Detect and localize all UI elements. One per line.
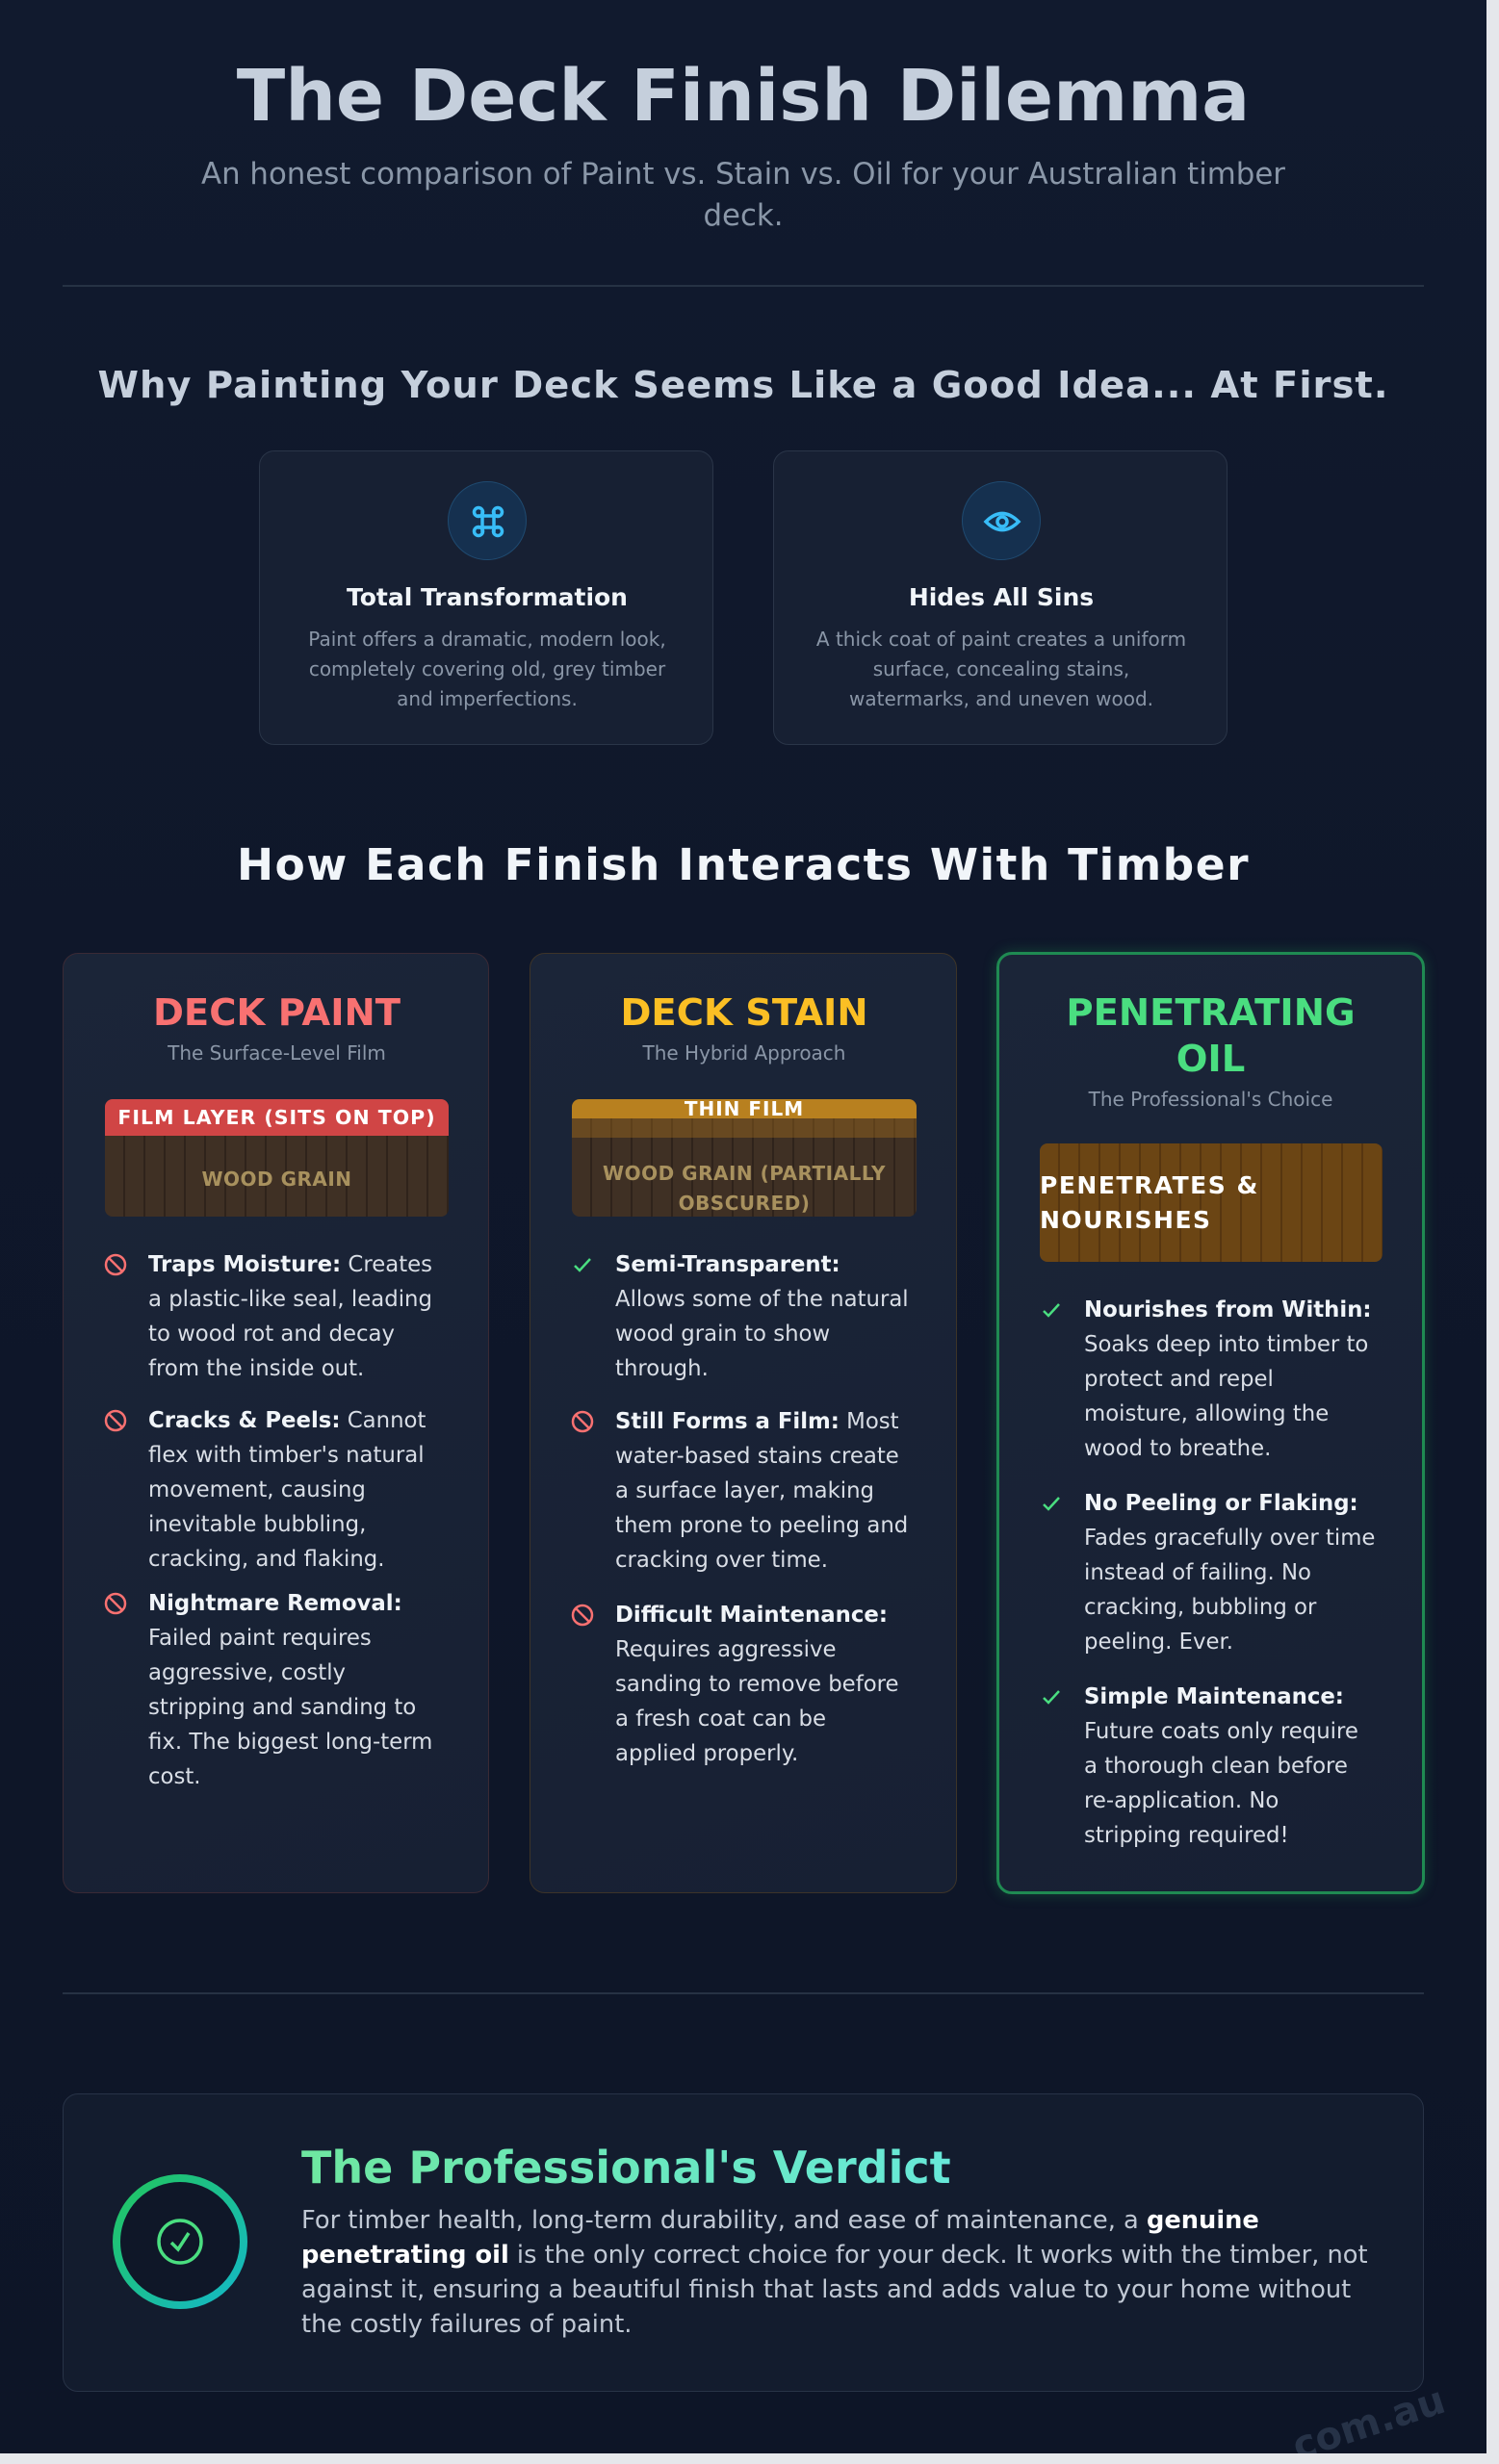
- card text: A thick coat of paint creates a uniform: [816, 628, 1186, 651]
- panel: penetrating oil: Fades gracefully over time: [1084, 1526, 1375, 1551]
- oil title: PENETRATING: [1066, 991, 1356, 1035]
- card text: [816, 628, 1186, 710]
- panel: penetrating oil: Soaks deep into timber to: [1084, 1332, 1368, 1357]
- panel: penetrating oil: cracking, bubbling or: [1084, 1595, 1316, 1620]
- panel: deck paint: Cracks & Peels: Cannot: [148, 1408, 426, 1433]
- panel: total transformation: [259, 450, 713, 745]
- panel: penetrating oil: No Peeling or Flaking:: [1084, 1491, 1358, 1516]
- paint subtitle: The Surface-Level Film: [168, 1041, 386, 1065]
- card text: Paint offers a dramatic, modern look,: [308, 628, 666, 651]
- panel: penetrating oil: moisture, allowing the: [1084, 1401, 1329, 1426]
- panel: deck paint: to wood rot and decay: [148, 1322, 395, 1347]
- verdict text: the costly failures of paint.: [301, 2310, 632, 2339]
- panel: hides all sins: [773, 450, 1228, 745]
- diagram: paint layers: WOOD GRAIN: [201, 1168, 352, 1191]
- panel: deck paint: inevitable bubbling,: [148, 1512, 366, 1537]
- card text: surface, concealing stains,: [873, 657, 1129, 680]
- panel: penetrating oil: instead of failing. No: [1084, 1560, 1311, 1585]
- panel: deck stain: Semi-Transparent:: [615, 1252, 840, 1277]
- stain title: DECK STAIN: [620, 991, 868, 1035]
- panel: deck stain: a surface layer, making: [615, 1478, 874, 1503]
- card title: Total Transformation: [347, 583, 628, 611]
- panel: deck paint: from the inside out.: [148, 1356, 364, 1381]
- card text: [308, 628, 666, 710]
- panel: deck paint: fix. The biggest long-term: [148, 1730, 432, 1755]
- panel: deck stain: [530, 953, 957, 1893]
- panel: deck stain: Difficult Maintenance:: [615, 1603, 888, 1628]
- card title: Hides All Sins: [909, 583, 1094, 611]
- paint title: DECK PAINT: [153, 991, 401, 1035]
- panel: deck stain: a fresh coat can be: [615, 1707, 826, 1732]
- panel: deck paint: movement, causing: [148, 1477, 366, 1502]
- panel: penetrating oil: Simple Maintenance:: [1084, 1684, 1344, 1709]
- panel: deck paint: a plastic-like seal, leading: [148, 1287, 432, 1312]
- panel: verdict: [63, 2093, 1424, 2392]
- diagram: stain layers: WOOD GRAIN (PARTIALLY: [603, 1162, 886, 1185]
- panel: deck stain: through.: [615, 1356, 709, 1381]
- panel: deck paint: Failed paint requires: [148, 1626, 372, 1651]
- heading: how each finish: How Each Finish Interacts With Timber: [237, 839, 1250, 890]
- panel: deck paint: flex with timber's natural: [148, 1443, 425, 1468]
- card text: watermarks, and uneven wood.: [849, 687, 1153, 710]
- diagram: stain layers: OBSCURED): [679, 1192, 810, 1215]
- subtitle: [201, 157, 1285, 233]
- panel: deck paint: cracking, and flaking.: [148, 1547, 385, 1572]
- oil list: [1043, 1297, 1375, 1848]
- stain list: [572, 1252, 909, 1766]
- oil title: [1066, 991, 1356, 1081]
- panel: penetrating oil: wood to breathe.: [1084, 1436, 1271, 1461]
- panel: deck stain: wood grain to show: [615, 1322, 830, 1347]
- panel: penetrating oil: [996, 952, 1425, 1894]
- diagram: stain layers: [572, 1099, 917, 1217]
- panel: penetrating oil: protect and repel: [1084, 1367, 1274, 1392]
- title: The Deck Finish Dilemma: [237, 55, 1250, 138]
- diagram: oil: PENETRATES &: [1040, 1171, 1259, 1199]
- panel: deck stain: Allows some of the natural: [615, 1287, 909, 1312]
- icon: verdict check circle: [113, 2174, 247, 2309]
- panel: penetrating oil: stripping required!: [1084, 1823, 1289, 1848]
- heading: why painting: Why Painting Your Deck Seems Like a Good Idea... At First.: [98, 364, 1388, 407]
- panel: penetrating oil: a thorough clean before: [1084, 1754, 1348, 1779]
- icon: eye: [962, 481, 1041, 560]
- diagram: paint layers: [105, 1099, 449, 1217]
- panel: penetrating oil: Nourishes from Within:: [1084, 1297, 1372, 1322]
- verdict heading: The Professional's Verdict: [301, 2142, 951, 2194]
- verdict text: [301, 2206, 1368, 2339]
- subtitle: deck.: [703, 198, 784, 233]
- panel: deck stain: them prone to peeling and: [615, 1513, 908, 1538]
- stain subtitle: The Hybrid Approach: [643, 1041, 845, 1065]
- panel: deck stain: cracking over time.: [615, 1548, 828, 1573]
- verdict text: penetrating oil is the only correct choice for your deck. It works with the timber, not: [301, 2241, 1368, 2270]
- icon: command: [448, 481, 527, 560]
- panel: deck stain: Requires aggressive: [615, 1637, 837, 1662]
- panel: deck paint: stripping and sanding to: [148, 1695, 416, 1720]
- card text: and imperfections.: [397, 687, 578, 710]
- card text: completely covering old, grey timber: [309, 657, 665, 680]
- oil title: OIL: [1176, 1038, 1245, 1081]
- paint list: [104, 1252, 432, 1789]
- panel: deck paint: aggressive, costly: [148, 1660, 346, 1685]
- oil subtitle: The Professional's Choice: [1089, 1088, 1332, 1111]
- panel: deck paint: [63, 953, 489, 1893]
- panel: deck paint: Traps Moisture: Creates: [148, 1252, 432, 1277]
- diagram: oil: [1040, 1143, 1383, 1262]
- panel: deck stain: Still Forms a Film: Most: [615, 1409, 899, 1434]
- diagram: oil: NOURISHES: [1040, 1206, 1212, 1234]
- subtitle: An honest comparison of Paint vs. Stain vs. Oil for your Australian timber: [201, 157, 1285, 192]
- diagram: paint layers: FILM LAYER (SITS ON TOP): [117, 1106, 436, 1129]
- panel: penetrating oil: peeling. Ever.: [1084, 1630, 1233, 1655]
- verdict text: For timber health, long-term durability, and ease of maintenance, a genuine: [301, 2206, 1259, 2235]
- panel: deck paint: Nightmare Removal:: [148, 1591, 402, 1616]
- verdict text: against it, ensuring a beautiful finish that lasts and adds value to your home without: [301, 2275, 1351, 2304]
- panel: penetrating oil: re-application. No: [1084, 1788, 1279, 1813]
- panel: penetrating oil: Future coats only require: [1084, 1719, 1358, 1744]
- panel: deck stain: sanding to remove before: [615, 1672, 899, 1697]
- panel: deck stain: applied properly.: [615, 1741, 798, 1766]
- panel: deck stain: water-based stains create: [615, 1444, 899, 1469]
- panel: deck paint: cost.: [148, 1764, 201, 1789]
